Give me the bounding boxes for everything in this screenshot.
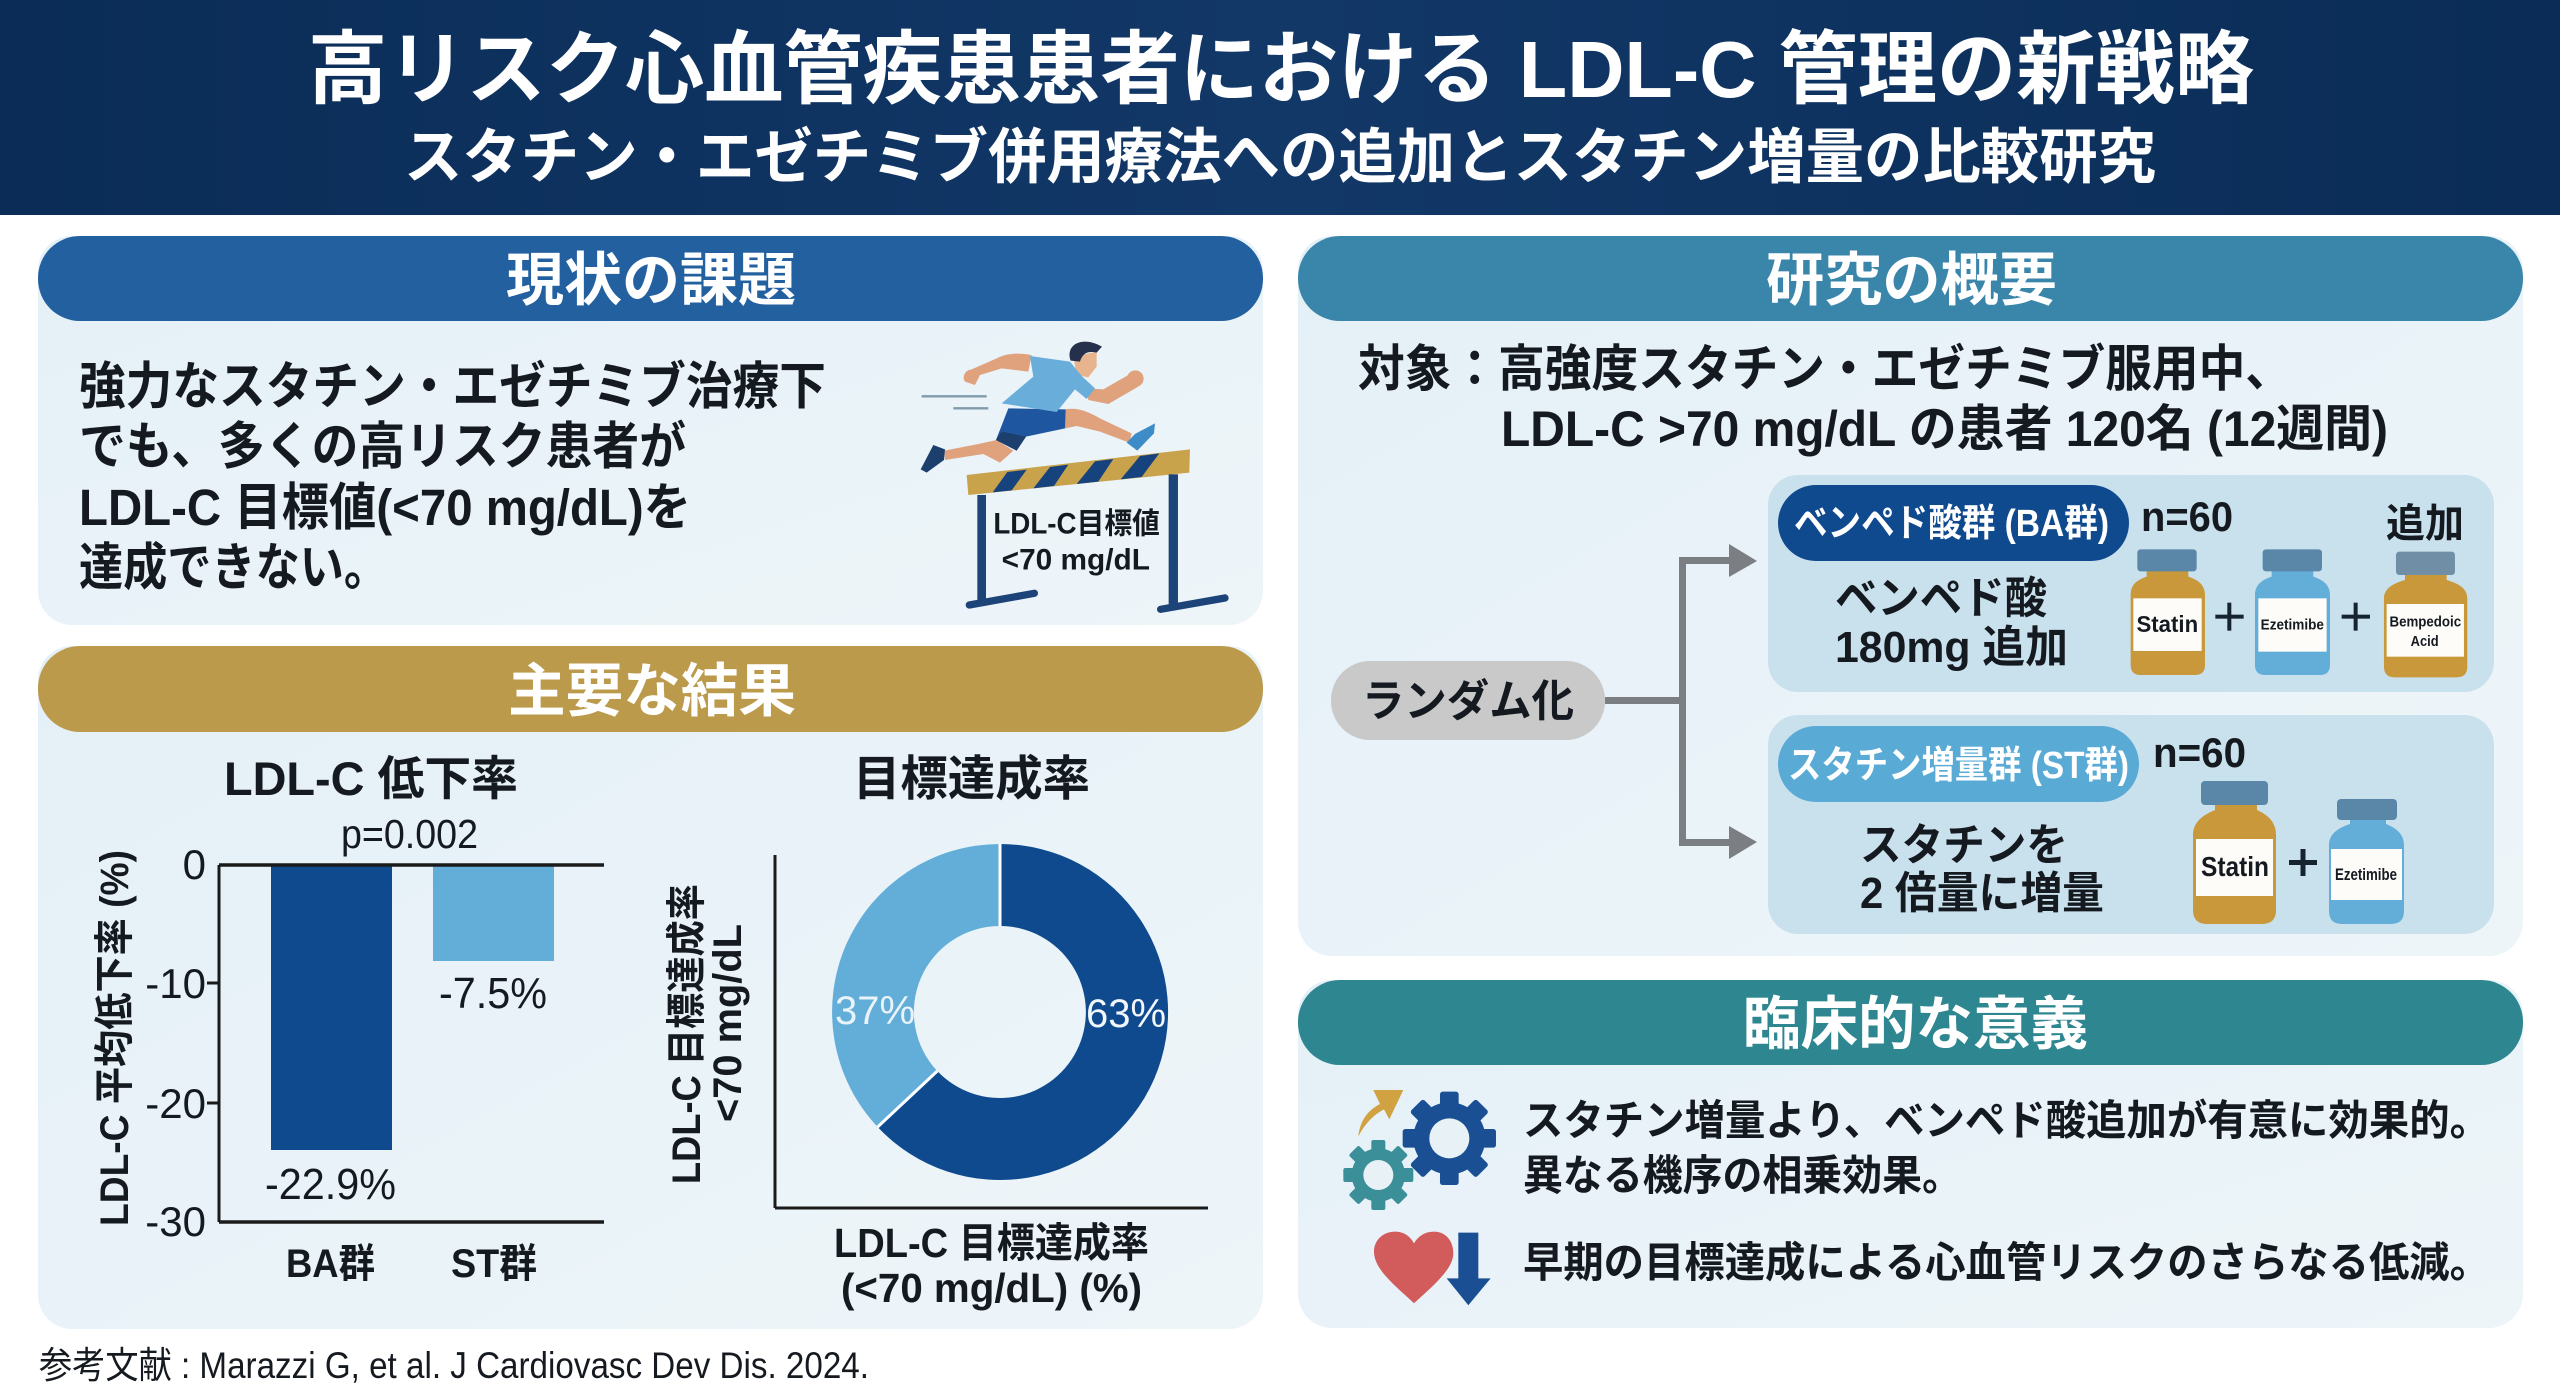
arm: bempedoic acid group: n=60 (2141, 493, 2233, 540)
challenge text: LDL-C 目標値(<70 mg/dL)を (79, 479, 691, 536)
donut chart: goal achievement: (<70 mg/dL) (%) (841, 1265, 1142, 1311)
group pill: ST: スタチン増量群 (ST群) (1788, 745, 2129, 787)
donut chart: goal achievement: <70 mg/dL (706, 924, 750, 1122)
icon: medicine bottles BA: Statin (2136, 611, 2198, 637)
text: synergy: 異なる機序の相乗効果。 (1523, 1152, 1962, 1199)
donut chart: goal achievement: LDL-C 目標達成率 (834, 1220, 1149, 1266)
icon: gears and arrow (1343, 1090, 1496, 1210)
heading: clinical significance (1298, 980, 2523, 1065)
arm: bempedoic acid group: 追加 (2386, 502, 2464, 546)
arm: bempedoic acid group: ベンペド酸 (1835, 574, 2047, 623)
bar chart: LDL-C reduction: ST群 (451, 1242, 537, 1286)
donut chart: goal achievement: 目標達成率 (853, 753, 1090, 806)
icon: medicine bottles ST: Ezetimibe (2335, 865, 2397, 884)
bar chart: LDL-C reduction: -20 (145, 1080, 206, 1127)
heading: clinical significance: 臨床的な意義 (1743, 992, 2088, 1057)
donut chart: goal achievement: LDL-C 目標達成率 (665, 884, 709, 1184)
icon: heart and down arrow (1374, 1232, 1491, 1305)
group pill: BA (1778, 485, 2129, 561)
bar chart: LDL-C reduction: 0 (183, 841, 206, 888)
header banner (0, 0, 2560, 215)
bar chart: LDL-C reduction: BA群 (286, 1242, 375, 1286)
panel: main results (38, 646, 1263, 1329)
randomization pill (1331, 661, 1605, 740)
group pill: ST (1778, 726, 2139, 802)
challenge text: 達成できない。 (79, 539, 388, 596)
donut chart: goal achievement (665, 753, 1208, 1311)
heading: current challenges: 現状の課題 (506, 248, 796, 313)
arm: statin up-titration group: n=60 (2153, 729, 2246, 776)
arm: statin up-titration group: 2 倍量に増量 (1860, 869, 2104, 918)
panel: study overview (1298, 236, 2523, 956)
icon: medicine bottles BA: Bempedoic (2389, 615, 2461, 631)
bar chart: LDL-C reduction (93, 752, 604, 1286)
heading: study overview: 研究の概要 (1766, 248, 2057, 313)
icon: medicine bottles ST (2193, 781, 2404, 924)
panel: current challenges (38, 236, 1263, 625)
icon: medicine bottles BA: Ezetimibe (2261, 617, 2324, 633)
heading: main results (38, 646, 1263, 732)
bar chart: LDL-C reduction: -30 (145, 1198, 206, 1245)
challenge text (79, 358, 826, 596)
donut chart: goal achievement: 37% (835, 989, 915, 1033)
donut chart: goal achievement: 63% (1086, 992, 1166, 1036)
icon: medicine bottles BA: Acid (2411, 634, 2439, 650)
arrow: randomization branches (1605, 544, 1757, 859)
text: synergy (1523, 1097, 2490, 1199)
bar chart: LDL-C reduction: p=0.002 (341, 811, 478, 857)
arm: statin up-titration group (1768, 715, 2494, 934)
bar chart: LDL-C reduction: -22.9% (265, 1160, 396, 1209)
arm: bempedoic acid group: 180mg 追加 (1835, 623, 2068, 672)
text: synergy: スタチン増量より、ベンペド酸追加が有意に効果的。 (1523, 1097, 2490, 1144)
icon: medicine bottles ST: Statin (2201, 851, 2269, 882)
icon: runner jumping hurdle (921, 342, 1225, 609)
title: 高リスク心血管疾患患者における LDL-C 管理の新戦略 (308, 25, 2254, 114)
subtitle: スタチン・エゼチミブ併用療法への追加とスタチン増量の比較研究 (404, 124, 2156, 191)
text: risk reduction: 早期の目標達成による心血管リスクのさらなる低減。 (1523, 1239, 2490, 1286)
bar chart: LDL-C reduction: -10 (145, 960, 206, 1007)
bar chart: LDL-C reduction: -7.5% (439, 969, 547, 1018)
panel: clinical significance (1298, 980, 2523, 1328)
heading: study overview (1298, 236, 2523, 321)
randomization pill: ランダム化 (1362, 677, 1574, 726)
challenge text: 強力なスタチン・エゼチミブ治療下 (79, 358, 826, 415)
icon: runner jumping hurdle: <70 mg/dL (1002, 543, 1150, 576)
study population text (1358, 341, 2388, 457)
challenge text: でも、多くの高リスク患者が (79, 418, 686, 475)
heading: main results: 主要な結果 (508, 659, 796, 724)
reference citation: 参考文献 : Marazzi G, et al. J Cardiovasc Dev Dis. 2024. (39, 1345, 869, 1386)
group pill: BA: ベンペド酸群 (BA群) (1794, 503, 2109, 545)
arm: bempedoic acid group (1768, 475, 2494, 692)
bar chart: LDL-C reduction: LDL-C 平均低下率 (%) (93, 850, 137, 1226)
heading: current challenges (38, 236, 1263, 321)
arm: statin up-titration group: スタチンを (1860, 821, 2068, 870)
study population text: LDL-C >70 mg/dL の患者 120名 (12週間) (1501, 401, 2388, 457)
bar chart: LDL-C reduction: LDL-C 低下率 (224, 752, 518, 805)
icon: runner jumping hurdle: LDL-C目標値 (993, 507, 1160, 540)
icon: medicine bottles BA (2131, 549, 2467, 677)
study population text: 対象：高強度スタチン・エゼチミブ服用中、 (1358, 341, 2292, 397)
